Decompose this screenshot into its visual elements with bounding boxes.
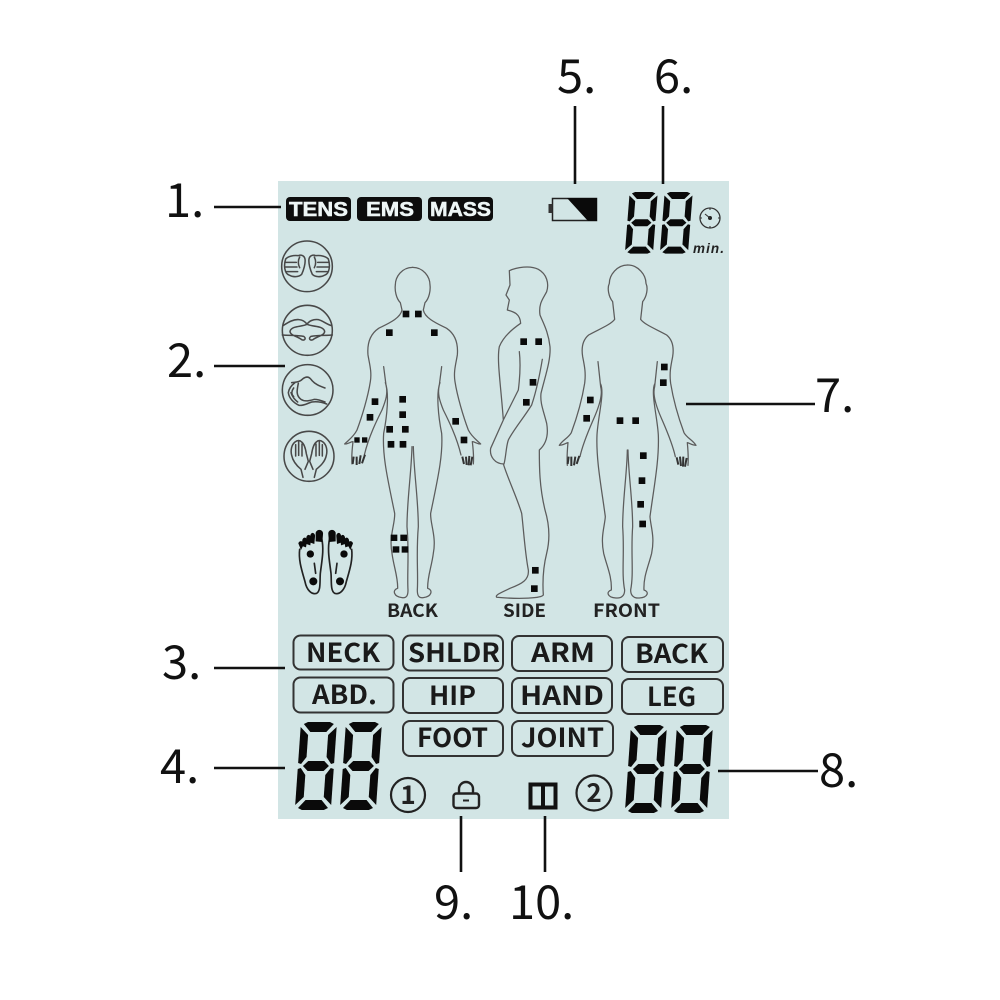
- icon: open palms: [284, 431, 334, 481]
- LCD panel background: [278, 181, 729, 819]
- figure: back view: [345, 267, 481, 598]
- callout 2: massage modes: [167, 322, 285, 391]
- icon: squeezing hands: [282, 305, 332, 355]
- callout 10: split channel: 10.: [509, 864, 574, 933]
- channel 1 intensity digits: [295, 722, 382, 810]
- mode badges: MASS: [430, 199, 491, 221]
- icon: kneading hands: [282, 241, 332, 292]
- channel 2 intensity digits: [625, 725, 713, 813]
- min. label: min.: [693, 241, 724, 256]
- icon: channel 2: [576, 773, 612, 810]
- body-area buttons: BACK: [635, 634, 708, 671]
- body-area buttons: SHLDR: [408, 633, 500, 670]
- callout 2: massage modes: 2.: [167, 322, 206, 391]
- callout 1: mode badges: [165, 162, 281, 231]
- callout 10: split channel: [509, 816, 574, 933]
- callout 4: channel 1 intensity: 4.: [160, 728, 199, 797]
- callout 4: channel 1 intensity: [160, 728, 285, 797]
- icon: feet reflexology: [298, 530, 353, 594]
- body-area buttons: ABD.: [311, 675, 377, 712]
- icon: channel 1: 1: [400, 775, 416, 812]
- icon: lock: [454, 782, 479, 808]
- callout 5: battery: 5.: [557, 38, 596, 107]
- icon: battery: [548, 198, 597, 221]
- callout 9: lock: [434, 816, 473, 933]
- body-area buttons: NECK: [306, 633, 380, 670]
- body-area buttons: HIP: [429, 676, 476, 713]
- view labels: SIDE: [503, 597, 546, 623]
- body-area buttons: HAND: [520, 676, 604, 713]
- callout 6: timer: 6.: [654, 38, 693, 107]
- icon: tapping fist: [282, 365, 333, 415]
- callout 9: lock: 9.: [434, 864, 473, 933]
- body-area buttons: LEG: [647, 677, 696, 714]
- callout 3: body areas: [162, 624, 285, 693]
- mode badges: [286, 197, 493, 221]
- body-area buttons: [294, 633, 723, 756]
- figure: side view: [490, 267, 550, 598]
- callout 7: body placement: 7.: [815, 357, 854, 426]
- view labels: FRONT: [593, 597, 660, 623]
- icon: clock: [700, 208, 720, 228]
- icon: split channel: [530, 784, 556, 808]
- body-area buttons: JOINT: [521, 718, 604, 755]
- body-area buttons: FOOT: [417, 718, 488, 755]
- icon: channel 2: 2: [586, 773, 602, 810]
- callout 1: mode badges: 1.: [165, 162, 204, 231]
- icon: channel 1: [391, 775, 425, 812]
- callout 8: channel 2 intensity: 8.: [819, 732, 858, 801]
- timer digits: [625, 192, 693, 254]
- mode badges: TENS: [289, 199, 348, 221]
- view labels: BACK: [387, 597, 439, 623]
- figure: front view: [559, 265, 696, 598]
- body-area buttons: ARM: [530, 633, 595, 670]
- callout 3: body areas: 3.: [162, 624, 201, 693]
- view labels: [387, 597, 660, 623]
- mode badges: EMS: [366, 199, 414, 221]
